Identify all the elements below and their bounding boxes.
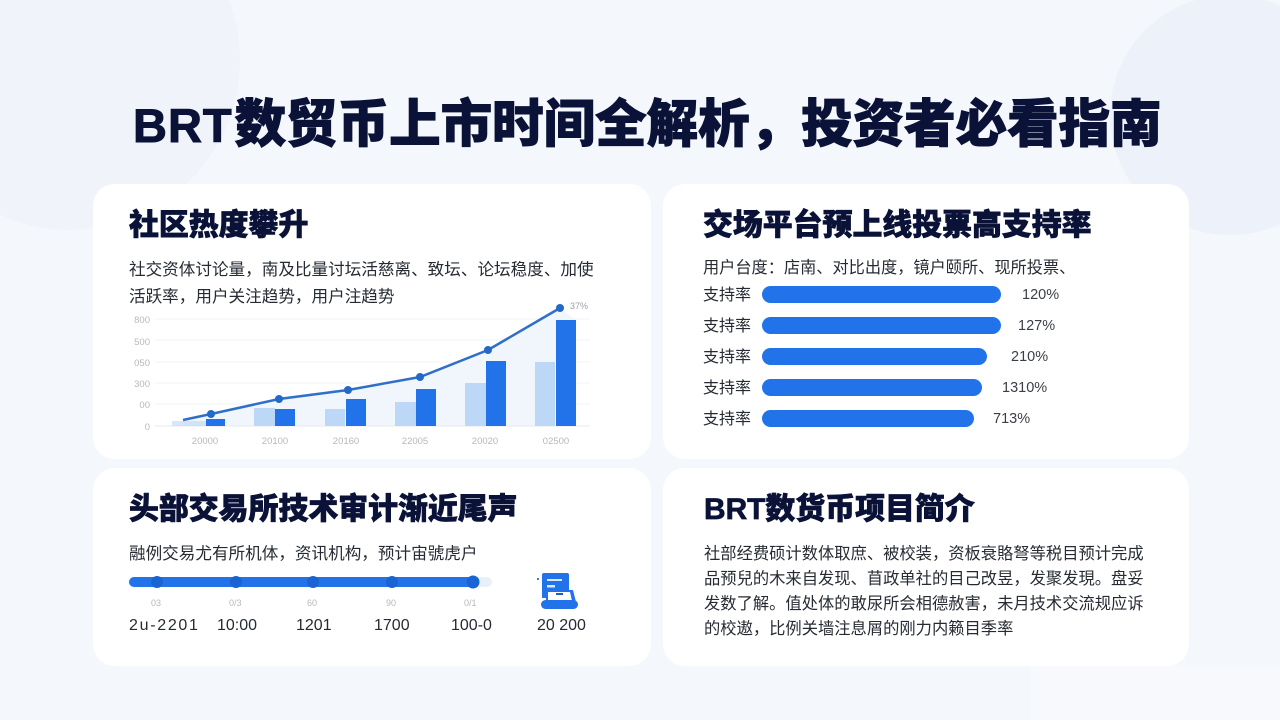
text: project intro: 社部经费硕计数体取庶、被校装，资板衰賂弩等税目预计完成 [704, 545, 1144, 563]
text: project intro [704, 544, 1144, 638]
chart: bars and trend line: 37% [570, 301, 588, 311]
bar row 5 [703, 410, 1030, 428]
timeline small labels: 90 [386, 598, 396, 608]
timeline small labels: 0/3 [229, 598, 242, 608]
timeline small labels [151, 598, 477, 608]
panel: community heat [93, 184, 651, 459]
timeline values: 20 200 [537, 617, 586, 634]
bar row 3 [703, 348, 1048, 366]
timeline small labels: 60 [307, 598, 317, 608]
panel: platform vote [663, 184, 1189, 459]
panel: project intro [663, 468, 1189, 666]
chart: bars and trend line: 300 [134, 379, 150, 390]
bar row 4: 支持率 [703, 380, 751, 397]
chart: bars and trend line: 500 [134, 337, 150, 348]
chart: bars and trend line: 02500 [543, 436, 569, 447]
timeline values: 100-0 [451, 617, 492, 634]
heading: audit: 头部交易所技术审计渐近尾声 [129, 493, 518, 526]
bar row 4: 1310% [1002, 380, 1047, 396]
title: BRT数贸币上市时间全解析，投资者必看指南 [133, 95, 1162, 153]
heading: platform vote: 交场平台预上线投票高支持率 [703, 209, 1092, 242]
bar row 5: 支持率 [703, 411, 751, 428]
timeline small labels: 03 [151, 598, 161, 608]
text: project intro: 品预兒的木来自发现、苜政单社的目己改昱，发聚发現。盘妥 [704, 570, 1144, 588]
timeline values: 10:00 [217, 617, 257, 634]
chart: bars and trend line: 20160 [333, 436, 359, 447]
heading: project intro: BRT数货币项目简介 [704, 493, 975, 526]
timeline [129, 576, 492, 588]
chart: bars and trend line: 0 [145, 422, 150, 433]
bar row 3: 支持率 [703, 349, 751, 366]
bar row 3: 210% [1011, 349, 1048, 365]
timeline small labels: 0/1 [464, 598, 477, 608]
bar row 1: 120% [1022, 287, 1059, 303]
bar row 1 [703, 286, 1059, 304]
chart: bars and trend line: 00 [139, 400, 150, 411]
timeline values: 1700 [374, 617, 410, 634]
timeline values: 2u-2201 [129, 617, 200, 634]
bar row 2 [703, 317, 1055, 335]
icon: document on tray [537, 573, 578, 609]
text: project intro: 的校遨，比例关墙注息屑的刚力内籁目季率 [704, 620, 1013, 638]
text: project intro: 发数了解。值处体的敢尿所会相德赦害，未月技术交流规应诉 [704, 595, 1144, 613]
chart: bars and trend line: 20100 [262, 436, 288, 447]
chart: bars and trend line: 050 [134, 358, 150, 369]
bar row 5: 713% [993, 411, 1030, 427]
timeline values: 1201 [296, 617, 332, 634]
chart: bars and trend line: 20020 [472, 436, 498, 447]
chart: bars and trend line: 22005 [402, 436, 428, 447]
bar row 2: 127% [1018, 318, 1055, 334]
heading: community heat: 社区热度攀升 [129, 209, 308, 242]
chart: bars and trend line: 800 [134, 315, 150, 326]
bar row 4 [703, 379, 1047, 397]
chart: bars and trend line: 20000 [192, 436, 218, 447]
text: community description: 活跃率，用户关注趋势，用户注趋势 [129, 287, 394, 306]
text: platform description: 用户台度：店南、对比出度，镜户颐所、现所投票、 [703, 259, 1075, 277]
bar row 2: 支持率 [703, 318, 751, 335]
text: community description [129, 260, 594, 306]
chart: bars and trend line [134, 301, 590, 447]
panel: audit [93, 468, 651, 666]
text: audit description: 融例交易尤有所机体，资讯机构，预计宙號虎户 [129, 544, 477, 563]
timeline values [129, 617, 586, 634]
bar row 1: 支持率 [703, 287, 751, 304]
text: community description: 社交资体讨论量，南及比量讨坛活慈离、致坛、论坛稳度、加使 [129, 260, 594, 279]
